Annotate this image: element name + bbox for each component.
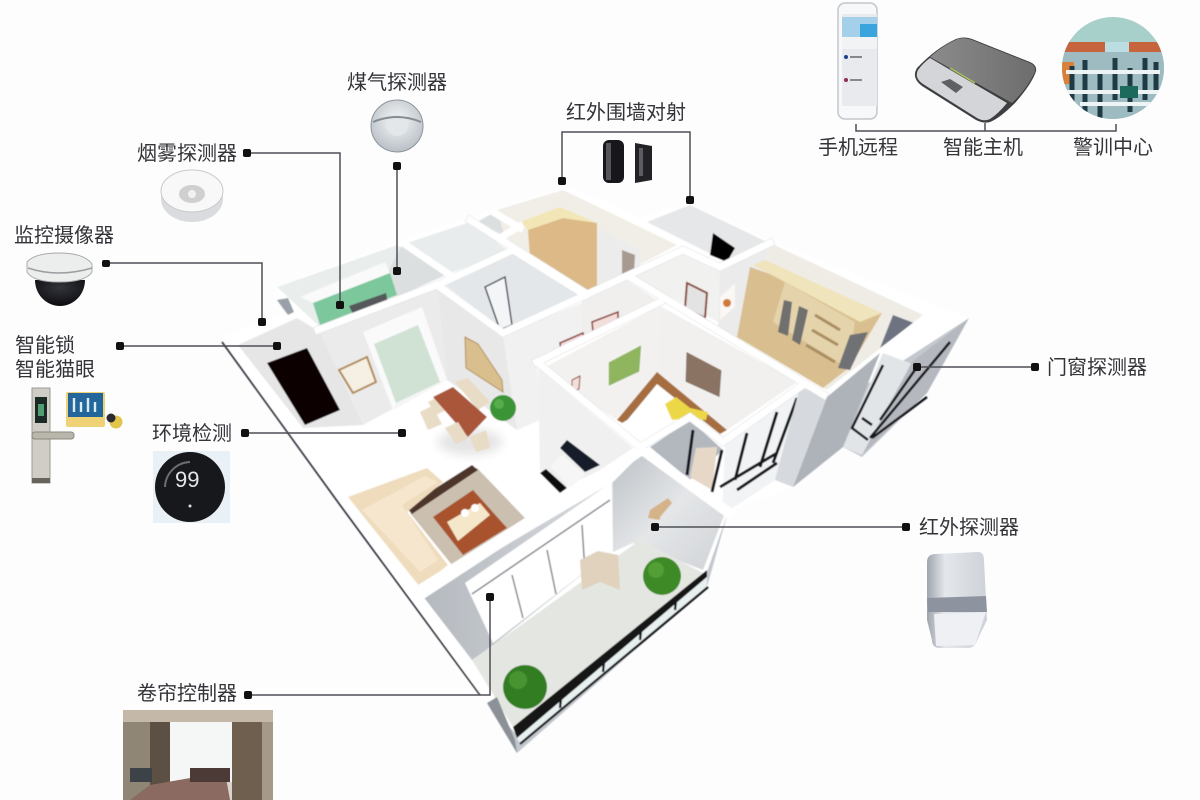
icon: infrared detector	[927, 552, 987, 648]
hall wall	[437, 287, 620, 430]
sofa and rug	[348, 465, 525, 587]
labels: remote, hub, alarm center: 警训中心	[1073, 136, 1153, 159]
big room outer wall top	[824, 315, 969, 410]
label: environment monitoring: 环境检测	[152, 422, 232, 445]
outer left edge	[222, 342, 480, 695]
entry wall with black door	[238, 318, 363, 428]
icon: smart hub	[915, 38, 1036, 123]
icon: gas detector	[371, 100, 423, 152]
icon: smart peephole	[66, 392, 122, 428]
icon: thermostat	[153, 451, 230, 523]
mirror room	[442, 252, 582, 330]
big room with wardrobe	[737, 243, 923, 390]
icon: smart door lock	[32, 388, 74, 483]
utility room	[407, 222, 510, 273]
label: smart lock and peephole: 智能锁	[15, 334, 75, 357]
balcony	[410, 445, 737, 753]
dining wall with glass door	[320, 287, 447, 425]
label: smart lock and peephole	[15, 334, 95, 381]
icon: dome camera	[27, 253, 92, 306]
label: surveillance camera: 监控摄像器	[14, 224, 114, 247]
black tv room	[647, 205, 767, 262]
dining table	[420, 378, 502, 455]
exterior side walls	[487, 318, 969, 753]
bedroom windows	[650, 390, 800, 515]
label: smoke detector: 烟雾探测器	[137, 142, 237, 165]
labels: remote, hub, alarm center: 手机远程	[818, 136, 898, 159]
wall tops and floor base	[222, 186, 969, 735]
kitchen room	[277, 243, 450, 327]
roof wedge near kitchen	[277, 298, 294, 315]
narrow hall room	[582, 280, 657, 337]
icon: smoke detector	[161, 170, 223, 222]
label: smart lock and peephole: 智能猫眼	[15, 358, 95, 381]
floor plan: 3D apartment cutaway	[222, 186, 969, 753]
hall wall pictures	[560, 312, 618, 351]
bedroom	[540, 306, 797, 447]
labels: remote, hub, alarm center	[818, 136, 1153, 159]
label: gas detector: 煤气探测器	[347, 71, 447, 94]
label: roller blind controller: 卷帘控制器	[137, 682, 237, 705]
photo: bedroom with curtains	[123, 710, 273, 800]
right balcony with window frame	[775, 318, 969, 487]
leader lines and dots	[102, 132, 1039, 699]
wall tops	[318, 187, 824, 447]
icon: infrared beam sensors	[603, 140, 652, 183]
study room	[633, 243, 770, 340]
label: infrared fence beam: 红外围墙对射	[566, 101, 686, 124]
tv wall	[538, 368, 633, 493]
icon: thermostat: 99	[175, 467, 199, 492]
plant in dining room	[490, 395, 516, 421]
label: infrared detector: 红外探测器	[919, 516, 1019, 539]
closet	[477, 213, 517, 235]
icon: smartphone	[838, 3, 877, 119]
labels: remote, hub, alarm center: 智能主机	[943, 136, 1023, 159]
connector bracket	[856, 123, 1116, 131]
label: door and window detector: 门窗探测器	[1047, 356, 1147, 379]
icon: alarm center photo	[1060, 15, 1166, 122]
wardrobe room	[497, 190, 677, 292]
